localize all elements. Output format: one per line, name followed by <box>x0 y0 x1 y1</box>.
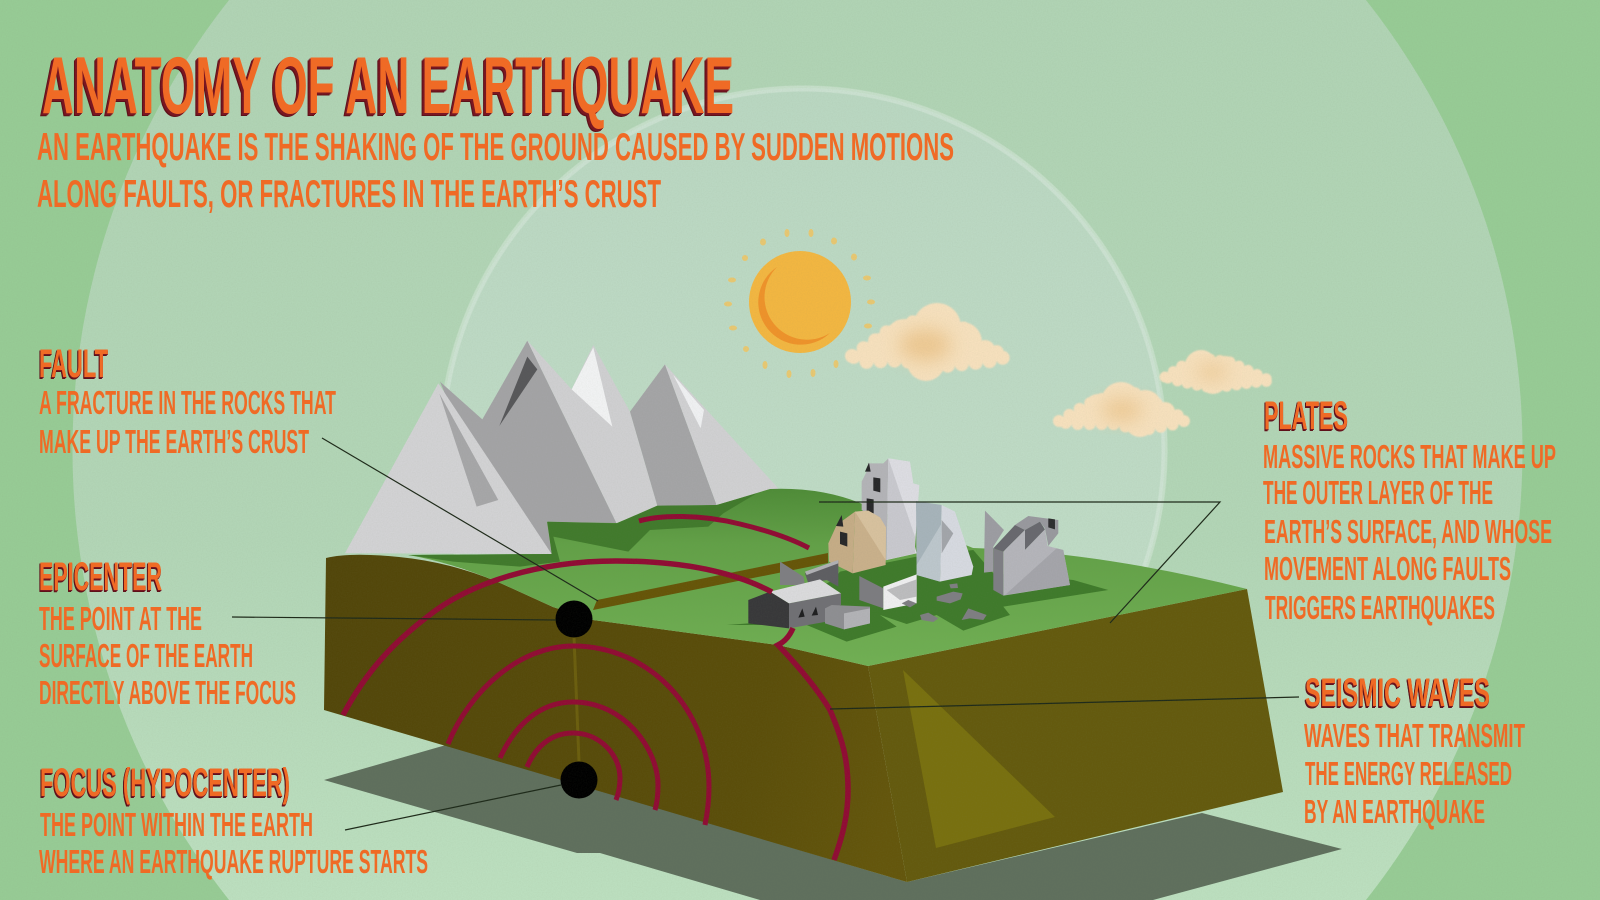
dome <box>447 91 1164 574</box>
buildings <box>727 458 1108 642</box>
grass top <box>408 489 1247 666</box>
text block: fault: MAKE UP THE EARTH’S CRUST <box>39 423 309 460</box>
rubble <box>902 583 987 622</box>
left soil face <box>324 555 907 882</box>
blue-grey building <box>916 501 973 582</box>
text block: epicenter: DIRECTLY ABOVE THE FOCUS <box>39 674 296 711</box>
seismic waves <box>343 516 848 860</box>
text block: focus: THE POINT WITHIN THE EARTH <box>40 806 313 843</box>
epicenter dot <box>556 600 592 638</box>
cloud 2 <box>1059 382 1186 437</box>
text block: plates <box>1263 394 1556 626</box>
text block: epicenter <box>39 555 296 711</box>
text block: fault: FAULT <box>39 342 108 386</box>
focus dot <box>560 762 598 798</box>
cloud 3 <box>1165 350 1271 394</box>
right soil face <box>868 589 1283 882</box>
title: ANATOMY OF AN EARTHQUAKE <box>42 41 734 131</box>
text block: plates: PLATES <box>1264 394 1348 438</box>
subtitle <box>37 126 954 216</box>
small house <box>748 579 870 629</box>
text block: epicenter: SURFACE OF THE EARTH <box>39 637 253 674</box>
beige building <box>828 511 886 573</box>
faint fault line <box>574 637 579 762</box>
factory <box>984 511 1070 596</box>
subtitle: ALONG FAULTS, OR FRACTURES IN THE EARTH’S CRUST <box>37 173 661 216</box>
text block: epicenter: THE POINT AT THE <box>39 600 202 637</box>
text block: focus <box>39 761 428 880</box>
mountains <box>345 341 778 554</box>
ground shadow <box>324 745 1342 900</box>
text block: focus: FOCUS (HYPOCENTER) <box>40 761 290 805</box>
text block: focus: WHERE AN EARTHQUAKE RUPTURE STARTS <box>39 843 428 880</box>
text block: fault: A FRACTURE IN THE ROCKS THAT <box>39 384 336 421</box>
icon: sun <box>724 229 875 378</box>
dark grass shading <box>408 493 757 567</box>
leader lines <box>232 438 1299 830</box>
text block: fault <box>39 342 336 460</box>
text block: seismic waves <box>1304 671 1525 830</box>
earth block <box>324 489 1283 882</box>
fault strip <box>593 553 828 610</box>
cloud 1 <box>852 303 1006 381</box>
wall ruins <box>780 560 917 610</box>
text block: epicenter: EPICENTER <box>39 555 162 599</box>
yellow facet <box>903 670 1055 848</box>
tall building <box>862 458 919 563</box>
